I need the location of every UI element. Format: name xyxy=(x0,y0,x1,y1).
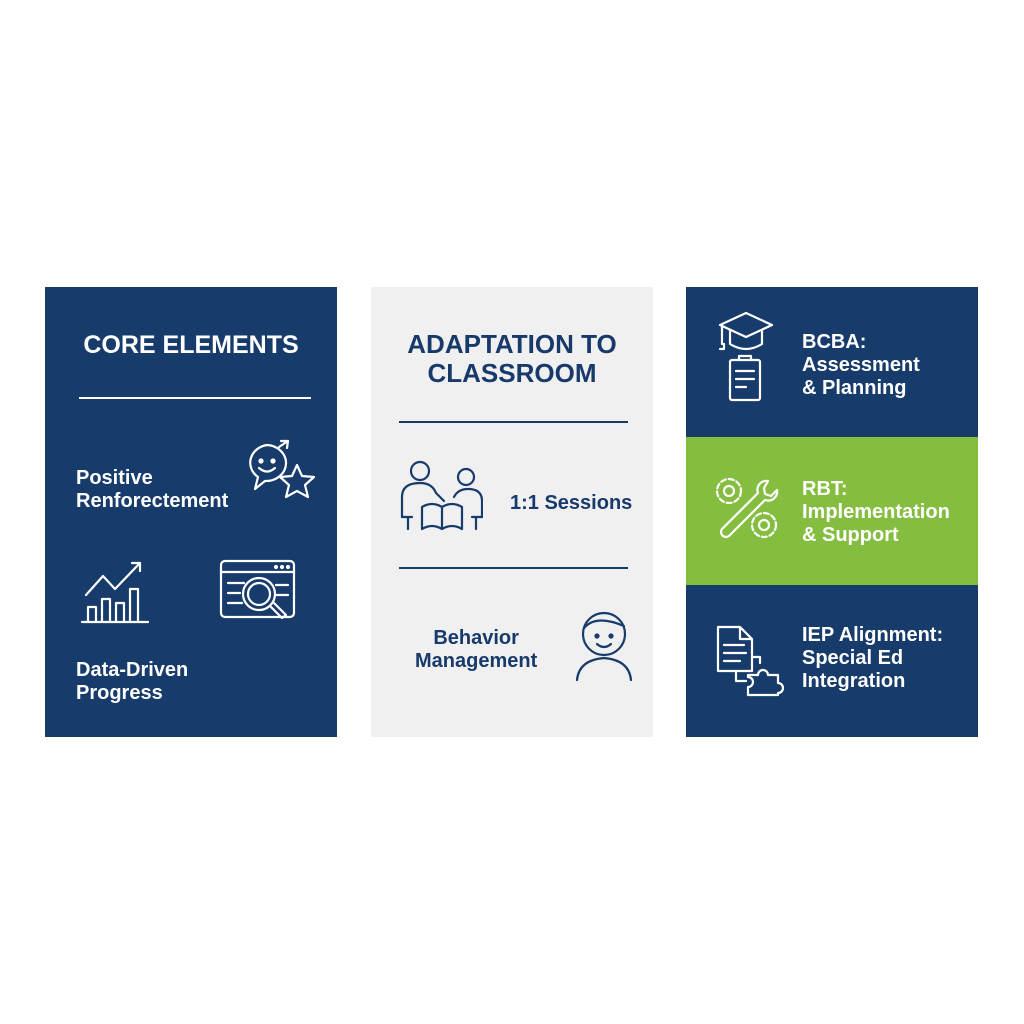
text: BCBA: & Planning xyxy=(802,377,906,399)
icon: grad cap clipboard xyxy=(718,312,774,402)
heading: adaptation to classroom xyxy=(407,329,617,388)
panel: roles xyxy=(686,287,978,737)
text: BCBA: BCBA: xyxy=(802,331,866,353)
icon: smiley chat star xyxy=(249,440,316,498)
icon: 1:1 session people with book xyxy=(400,460,483,530)
icon: document puzzle xyxy=(716,626,784,696)
text: behavior management: Management xyxy=(415,650,537,672)
text: behavior management xyxy=(415,627,538,672)
icon: person face xyxy=(576,612,632,682)
text: 1:1 sessions: 1:1 Sessions xyxy=(510,492,632,514)
text: IEP: Integration xyxy=(802,670,905,692)
panel: core elements xyxy=(45,287,337,737)
text: data-driven progress: Progress xyxy=(76,682,163,704)
text: positive reinforcement xyxy=(76,467,228,512)
text: IEP xyxy=(802,624,943,692)
text: positive reinforcement: Positive xyxy=(76,467,153,489)
text: RBT: & Support xyxy=(802,524,899,546)
text: RBT: RBT: xyxy=(802,478,848,500)
section: BCBA xyxy=(718,312,920,402)
text: RBT: Implementation xyxy=(802,501,950,523)
text: IEP: Special Ed xyxy=(802,647,903,669)
text: data-driven progress: Data-Driven xyxy=(76,659,188,681)
text: BCBA xyxy=(802,331,920,399)
icon: browser magnifier xyxy=(220,560,296,620)
section: RBT xyxy=(686,437,978,585)
text: RBT xyxy=(802,478,950,546)
icon: gears wrench xyxy=(716,478,778,538)
text: BCBA: Assessment xyxy=(802,354,920,376)
panel: adaptation to classroom xyxy=(371,287,653,737)
section: IEP xyxy=(716,624,943,696)
heading: adaptation to classroom: ADAPTATION TO xyxy=(407,329,617,359)
text: data-driven progress xyxy=(76,659,188,704)
text: behavior management: Behavior xyxy=(433,627,519,649)
text: IEP: IEP Alignment: xyxy=(802,624,943,646)
icon: bar chart xyxy=(80,562,150,624)
heading: adaptation to classroom: CLASSROOM xyxy=(428,358,596,388)
text: positive reinforcement: Renforectement xyxy=(76,490,228,512)
heading: core elements: CORE ELEMENTS xyxy=(83,331,299,359)
